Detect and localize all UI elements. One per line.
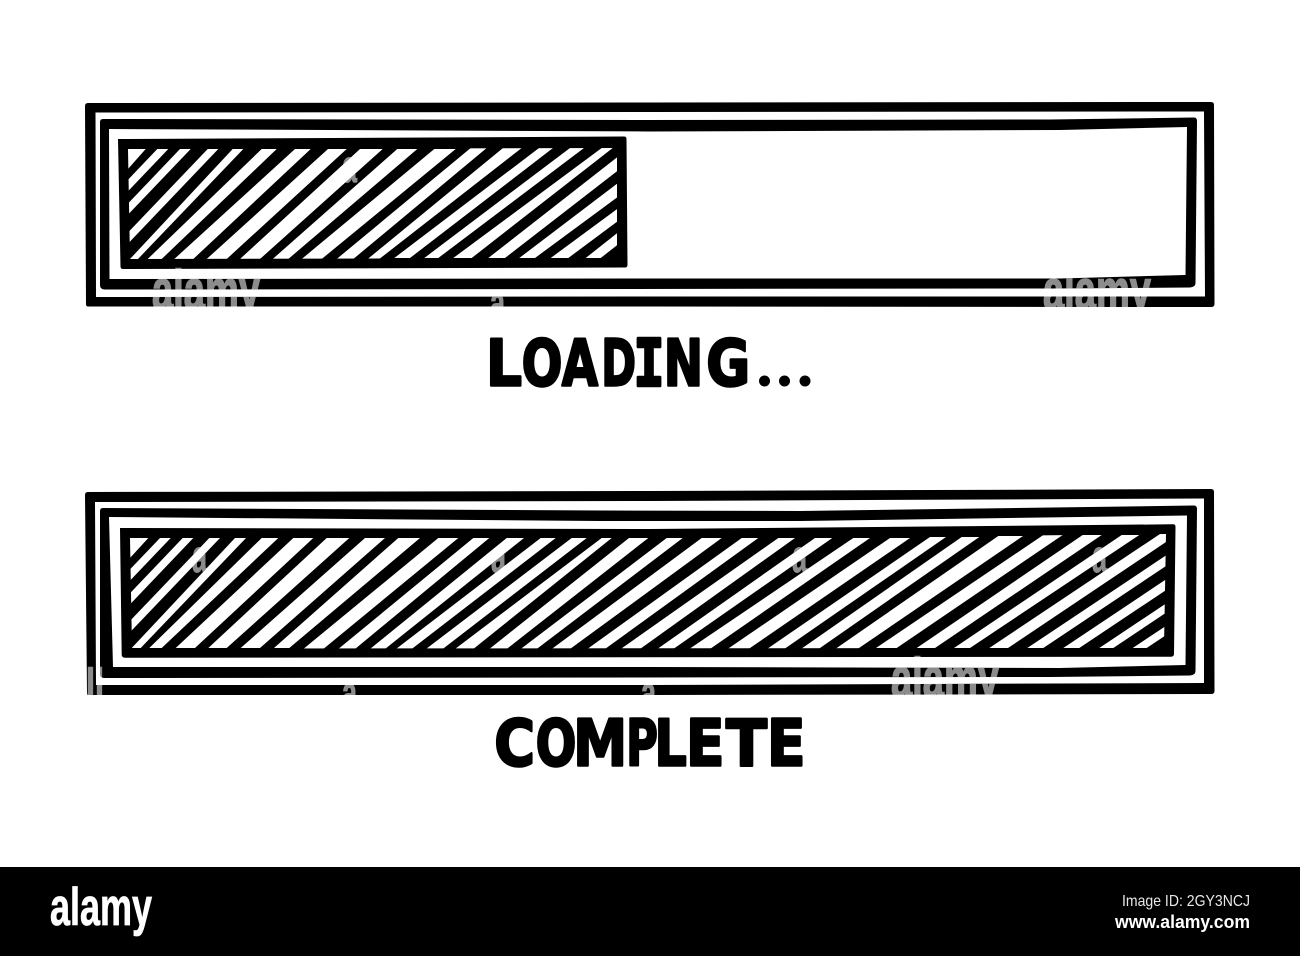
watermark overlays: a — [192, 531, 208, 582]
image id: Image ID: 2GY3NCJ — [1122, 893, 1250, 910]
label: loading: G — [706, 328, 750, 402]
loading bar hatch stripes — [128, 148, 617, 259]
label: loading: N — [664, 328, 703, 402]
watermark overlays: a — [792, 531, 808, 582]
label: loading: A — [562, 328, 599, 402]
label: complete: C — [494, 708, 535, 782]
label: loading: D — [601, 328, 636, 402]
complete bar outer frame — [85, 489, 1214, 695]
footer bar — [0, 867, 1300, 956]
loading bar filled section — [118, 136, 628, 269]
complete bar hatch stripes — [130, 534, 1166, 648]
label: complete — [494, 708, 806, 782]
loading bar inner frame — [100, 118, 1197, 290]
watermark overlays: alamy — [1043, 258, 1151, 321]
footer logo: alamy — [50, 878, 152, 937]
label: complete: O — [536, 708, 576, 782]
website: www.alamy.com — [1114, 912, 1250, 932]
watermark overlays: a — [490, 277, 506, 328]
label: loading: L — [486, 328, 522, 402]
label: complete: P — [626, 708, 658, 782]
watermark overlays: a — [641, 667, 657, 718]
watermark overlays: a — [491, 531, 507, 582]
watermark overlays: alamy — [152, 258, 260, 321]
label: complete: M — [573, 708, 627, 782]
watermark overlays — [86, 141, 1151, 720]
label: loading — [486, 328, 750, 408]
label: loading dots — [759, 376, 810, 386]
label: complete: L — [654, 708, 687, 782]
label: complete: E — [767, 708, 806, 782]
complete bar filled section — [120, 524, 1176, 658]
panel: loading progress bar — [52, 102, 1214, 307]
label: complete: E — [686, 708, 725, 782]
watermark overlays: ll — [86, 657, 104, 720]
watermark overlays: a — [342, 667, 358, 718]
label: loading: I — [634, 328, 664, 408]
complete bar inner frame — [100, 506, 1197, 678]
watermark overlays: alamy — [891, 646, 999, 709]
label: complete: T — [726, 708, 767, 782]
watermark overlays: a — [1092, 531, 1108, 582]
panel: complete progress bar — [55, 489, 1300, 695]
watermark overlays: a — [342, 141, 358, 192]
loading bar outer frame — [85, 102, 1214, 307]
label: loading: O — [522, 328, 562, 402]
